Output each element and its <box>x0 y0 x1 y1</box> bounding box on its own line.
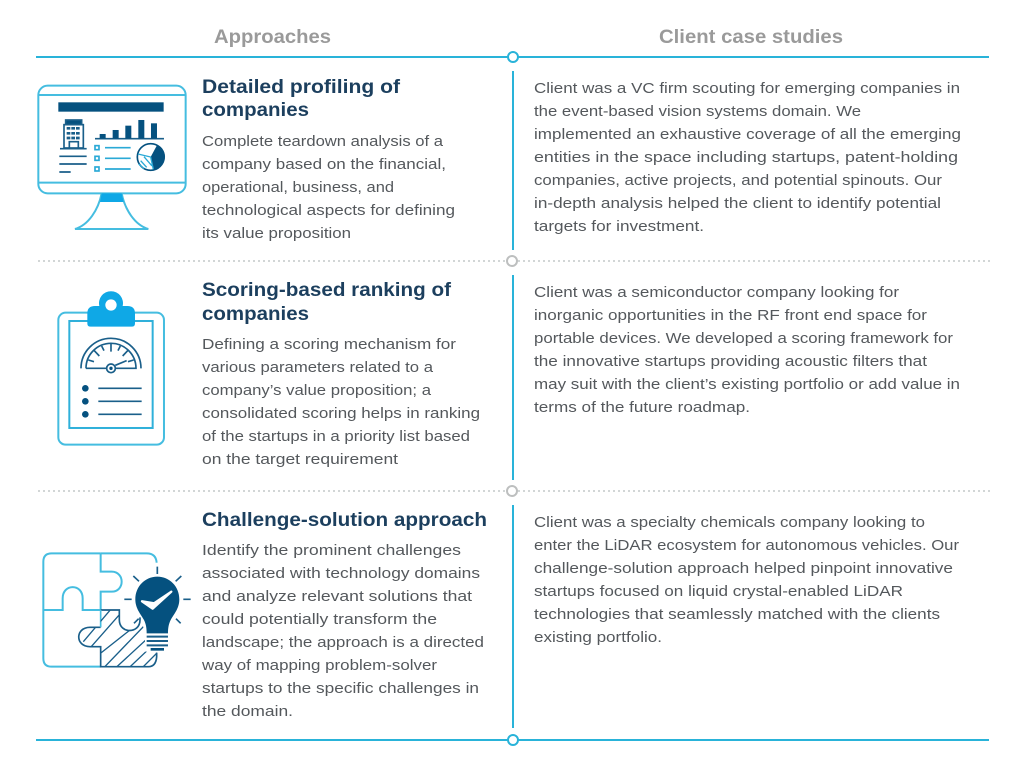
icon: clipboard with gauge <box>58 291 164 445</box>
block: challenge-solution description: associated with technology domains <box>202 565 480 582</box>
block: case study 1: implemented an exhaustive coverage of all the emerging <box>534 126 961 143</box>
block: case study 2: portable devices. We developed a scoring framework for <box>534 330 953 347</box>
block: detailed profiling heading: companies <box>202 100 309 121</box>
block: challenge-solution description: could potentially transform the <box>202 611 437 628</box>
block: scoring heading <box>202 280 452 325</box>
heading: Approaches: Approaches <box>214 27 331 48</box>
block: challenge-solution description: way of mapping problem-solver <box>201 657 437 674</box>
block: case study 3: startups focused on liquid crystal-enabled LiDAR <box>534 583 903 600</box>
node: top timeline <box>508 52 518 62</box>
block: detailed profiling description <box>202 133 455 242</box>
block: challenge-solution description <box>201 542 484 720</box>
block: case study 2: the innovative startups providing acoustic filters that <box>534 353 928 370</box>
block: case study 1: the event-based vision systems domain. We <box>534 103 861 120</box>
block: challenge-solution description: startups to the specific challenges in <box>202 680 479 697</box>
block: scoring heading: companies <box>202 304 309 325</box>
block: case study 1: entities in the space including startups, patent-holding <box>534 149 958 166</box>
icon: puzzle and light bulb <box>43 553 191 670</box>
block: detailed profiling description: Complete teardown analysis of a <box>202 133 444 150</box>
block: case study 1: Client was a VC firm scouting for emerging companies in <box>534 80 960 97</box>
icon: monitor with dashboard <box>38 86 186 229</box>
block: scoring description <box>202 336 480 468</box>
heading: Client case studies: Client case studies <box>659 27 843 48</box>
block: case study 1: in-depth analysis helped the client to identify potential <box>534 195 941 212</box>
block: case study 3: challenge-solution approach helped pinpoint innovative <box>534 560 953 577</box>
node: row divider 2 <box>507 486 517 496</box>
block: case study 2: may suit with the client’s existing portfolio or add value in <box>534 376 960 393</box>
block: scoring description: on the target requirement <box>202 451 399 468</box>
block: case study 3: enter the LiDAR ecosystem for autonomous vehicles. Our <box>534 537 959 554</box>
block: case study 2: inorganic opportunities in the RF front end space for <box>534 307 927 324</box>
block: scoring description: various parameters related to a <box>202 359 434 376</box>
node: row divider 1 <box>507 256 517 266</box>
block: case study 1 <box>534 80 961 235</box>
node: bottom timeline <box>508 735 518 745</box>
block: detailed profiling heading <box>202 77 401 121</box>
block: case study 3 <box>534 514 959 646</box>
block: case study 2: terms of the future roadmap. <box>534 399 750 416</box>
block: detailed profiling description: its value proposition <box>202 225 351 242</box>
block: detailed profiling heading: Detailed profiling of <box>202 77 401 98</box>
block: scoring description: company’s value proposition; a <box>202 382 432 399</box>
block: scoring description: of the startups in a priority list based <box>202 428 470 445</box>
block: challenge-solution description: the domain. <box>202 703 293 720</box>
block: detailed profiling description: operational, business, and <box>202 179 394 196</box>
block: case study 3: Client was a specialty chemicals company looking to <box>534 514 925 531</box>
block: detailed profiling description: company based on the financial, <box>202 156 446 173</box>
block: case study 1: companies, active projects, and potential spinouts. Our <box>534 172 942 189</box>
block: challenge-solution description: Identify the prominent challenges <box>202 542 461 559</box>
block: scoring description: consolidated scoring helps in ranking <box>202 405 480 422</box>
block: challenge-solution heading: Challenge-solution approach <box>202 510 487 531</box>
block: challenge-solution description: landscape; the approach is a directed <box>202 634 484 651</box>
block: case study 2: Client was a semiconductor company looking for <box>534 284 899 301</box>
block: case study 3: existing portfolio. <box>534 629 662 646</box>
block: detailed profiling description: technological aspects for defining <box>202 202 455 219</box>
block: case study 2 <box>534 284 960 416</box>
block: case study 3: technologies that seamlessly matched with the clients <box>534 606 940 623</box>
block: scoring heading: Scoring-based ranking of <box>202 280 452 301</box>
block: case study 1: targets for investment. <box>534 218 704 235</box>
block: challenge-solution description: and analyze relevant solutions that <box>202 588 473 605</box>
block: scoring description: Defining a scoring mechanism for <box>202 336 456 353</box>
